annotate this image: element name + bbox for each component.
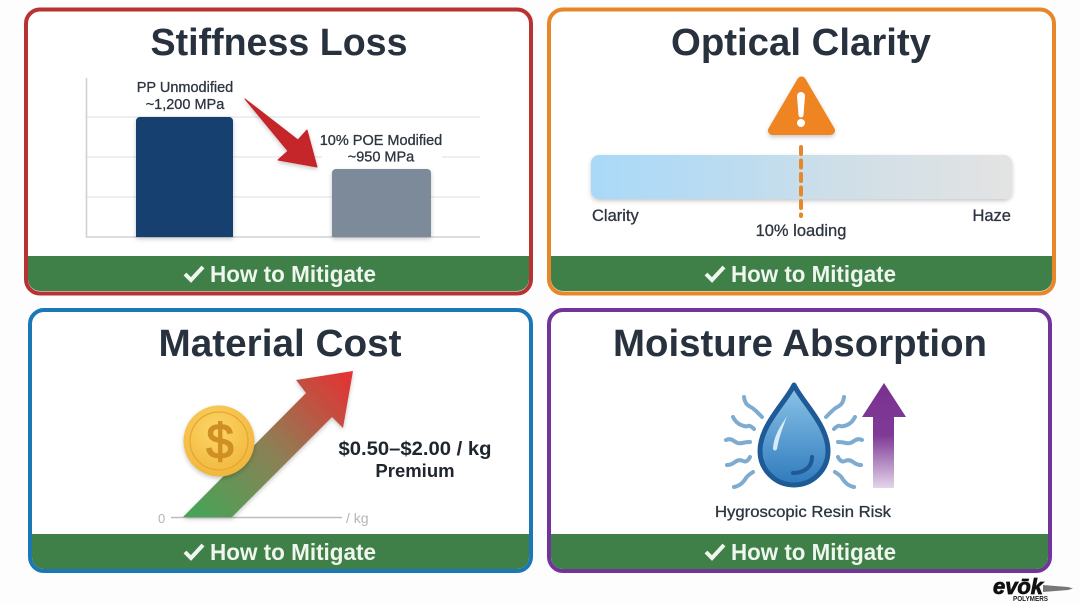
axis: 0 (158, 511, 165, 526)
icon: dollar coin (184, 406, 254, 476)
label: POE modified (320, 133, 442, 166)
label: 10% loading: 10% loading (756, 222, 846, 240)
logo: evok polymers (993, 574, 1073, 603)
heading: moisture absorption: Moisture Absorption (613, 323, 987, 365)
icon: water drop (760, 385, 828, 485)
icon: warning triangle (772, 81, 830, 130)
icon: moisture squiggles (726, 397, 862, 487)
mitigate bar: How to Mitigate (210, 539, 376, 565)
label: POE modified: ~950 MPa (348, 150, 415, 166)
arrow: rising cost (183, 371, 353, 517)
label: POE modified: 10% POE Modified (320, 133, 442, 149)
panel: material cost (30, 310, 531, 571)
mitigate bar: How to Mitigate (210, 261, 376, 287)
heading: material cost: Material Cost (158, 323, 402, 365)
logo: evok polymers: evōk (993, 574, 1045, 599)
label: haze: Haze (972, 207, 1011, 225)
mitigate bar (32, 534, 529, 569)
axis (158, 510, 369, 526)
dashed marker (799, 147, 803, 216)
arrow: stiffness drop (245, 99, 317, 167)
arrow: purple up (862, 383, 906, 488)
mitigate bar: How to Mitigate (731, 539, 896, 565)
logo: evok polymers: POLYMERS (1013, 596, 1048, 603)
panel: stiffness loss (26, 10, 531, 294)
panel: optical clarity (549, 10, 1054, 294)
mitigate bar (551, 256, 1052, 291)
mitigate bar (551, 534, 1048, 569)
icon: dollar coin: $ (206, 415, 234, 469)
heading: stiffness loss: Stiffness Loss (150, 22, 408, 64)
gradient bar: clarity to haze (591, 155, 1012, 199)
axis: / kg (346, 510, 369, 526)
label: PP unmodified: ~1,200 MPa (146, 97, 225, 113)
label: PP unmodified: PP Unmodified (137, 80, 233, 96)
heading: optical clarity: Optical Clarity (671, 22, 931, 64)
label: premium: $0.50–$2.00 / kg (338, 438, 492, 460)
mitigate bar: How to Mitigate (731, 261, 896, 287)
label: clarity: Clarity (592, 207, 640, 225)
mitigate bar (28, 256, 529, 291)
bar: POE modified (332, 169, 431, 237)
panel: moisture absorption (549, 310, 1050, 571)
bar: PP unmodified (136, 117, 233, 237)
label: hygroscopic resin risk: Hygroscopic Resin Risk (715, 504, 892, 521)
bar chart: stiffness (86, 78, 480, 237)
label: premium word: Premium (375, 460, 455, 481)
